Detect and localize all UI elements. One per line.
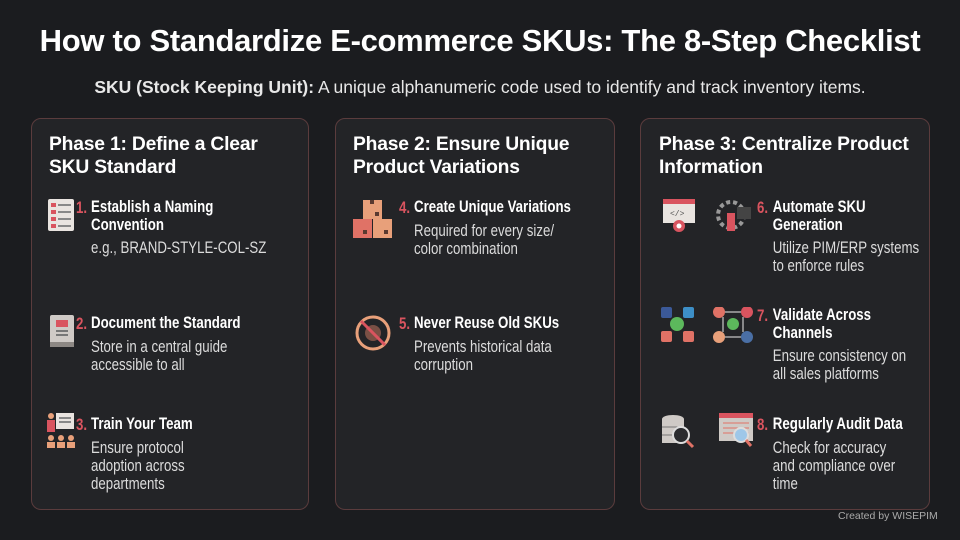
icon: boxes [353, 200, 392, 238]
step 4: Required for every size/ [414, 221, 554, 240]
step 4 [399, 197, 571, 258]
step 8: Check for accuracy [773, 438, 886, 457]
step 6 [757, 197, 919, 275]
step 4: color combination [414, 239, 518, 258]
step 8: and compliance over [773, 456, 895, 475]
step 2: accessible to all [91, 355, 185, 374]
step 4: 4. [399, 198, 410, 217]
phase 2 heading: Phase 2: Ensure Unique [353, 134, 569, 155]
step 3 [76, 414, 193, 493]
step 4: Create Unique Variations [414, 197, 571, 216]
step 7: all sales platforms [773, 364, 879, 383]
step 2: Document the Standard [91, 313, 241, 332]
phase 1 heading: Phase 1: Define a Clear [49, 134, 258, 155]
icon: book [50, 315, 74, 347]
step 2: Store in a central guide [91, 337, 227, 356]
icon: checklist [48, 199, 74, 231]
phase 1 heading [49, 134, 258, 178]
step 1: 1. [76, 198, 87, 217]
step 5: Prevents historical data [414, 337, 552, 356]
step 7: Channels [773, 323, 832, 342]
icons: channels [661, 307, 753, 343]
step 3: departments [91, 474, 165, 493]
phase 2 heading: Product Variations [353, 157, 520, 178]
step 5: 5. [399, 314, 410, 333]
phase 3 heading: Phase 3: Centralize Product [659, 134, 909, 155]
icons: automation: </> [670, 210, 685, 219]
step 8: 8. [757, 415, 768, 434]
step 6: Automate SKU [773, 197, 866, 216]
step 7: Validate Across [773, 305, 871, 324]
panel: phase 2 [335, 118, 615, 510]
step 7: Ensure consistency on [773, 346, 906, 365]
footer credit: Created by WISEPIM [838, 510, 938, 522]
step 6: Utilize PIM/ERP systems [773, 238, 919, 257]
icons: audit [662, 413, 753, 448]
step 8: time [773, 474, 798, 493]
panel: phase 3 [640, 118, 930, 510]
step 1: Establish a Naming [91, 197, 213, 216]
step 6: 6. [757, 198, 768, 217]
step 3: 3. [76, 415, 87, 434]
step 5: corruption [414, 355, 473, 374]
icons: automation [663, 199, 751, 232]
step 5: Never Reuse Old SKUs [414, 313, 559, 332]
step 6: to enforce rules [773, 256, 864, 275]
step 8 [757, 414, 903, 493]
step 5 [399, 313, 559, 374]
subtitle: SKU (Stock Keeping Unit): A unique alphanumeric code used to identify and track inventory items. [94, 77, 866, 97]
step 3: adoption across [91, 456, 185, 475]
step 2 [76, 313, 241, 374]
step 7 [757, 305, 906, 383]
step 6: Generation [773, 215, 843, 234]
step 3: Train Your Team [91, 414, 193, 433]
icon: trainer [47, 413, 75, 448]
step 8: Regularly Audit Data [773, 414, 903, 433]
step 7: 7. [757, 306, 768, 325]
phase 1 heading: SKU Standard [49, 157, 176, 178]
phase 2 heading [353, 134, 569, 178]
phase 3 heading: Information [659, 157, 763, 178]
step 3: Ensure protocol [91, 438, 184, 457]
step 1 [76, 197, 266, 257]
title: How to Standardize E-commerce SKUs: The 8-Step Checklist [40, 23, 920, 58]
step 1: e.g., BRAND-STYLE-COL-SZ [91, 238, 266, 257]
icon: no reuse [356, 316, 390, 350]
step 2: 2. [76, 314, 87, 333]
step 1: Convention [91, 215, 164, 234]
panel: phase 1 [31, 118, 309, 510]
phase 3 heading [659, 134, 909, 178]
